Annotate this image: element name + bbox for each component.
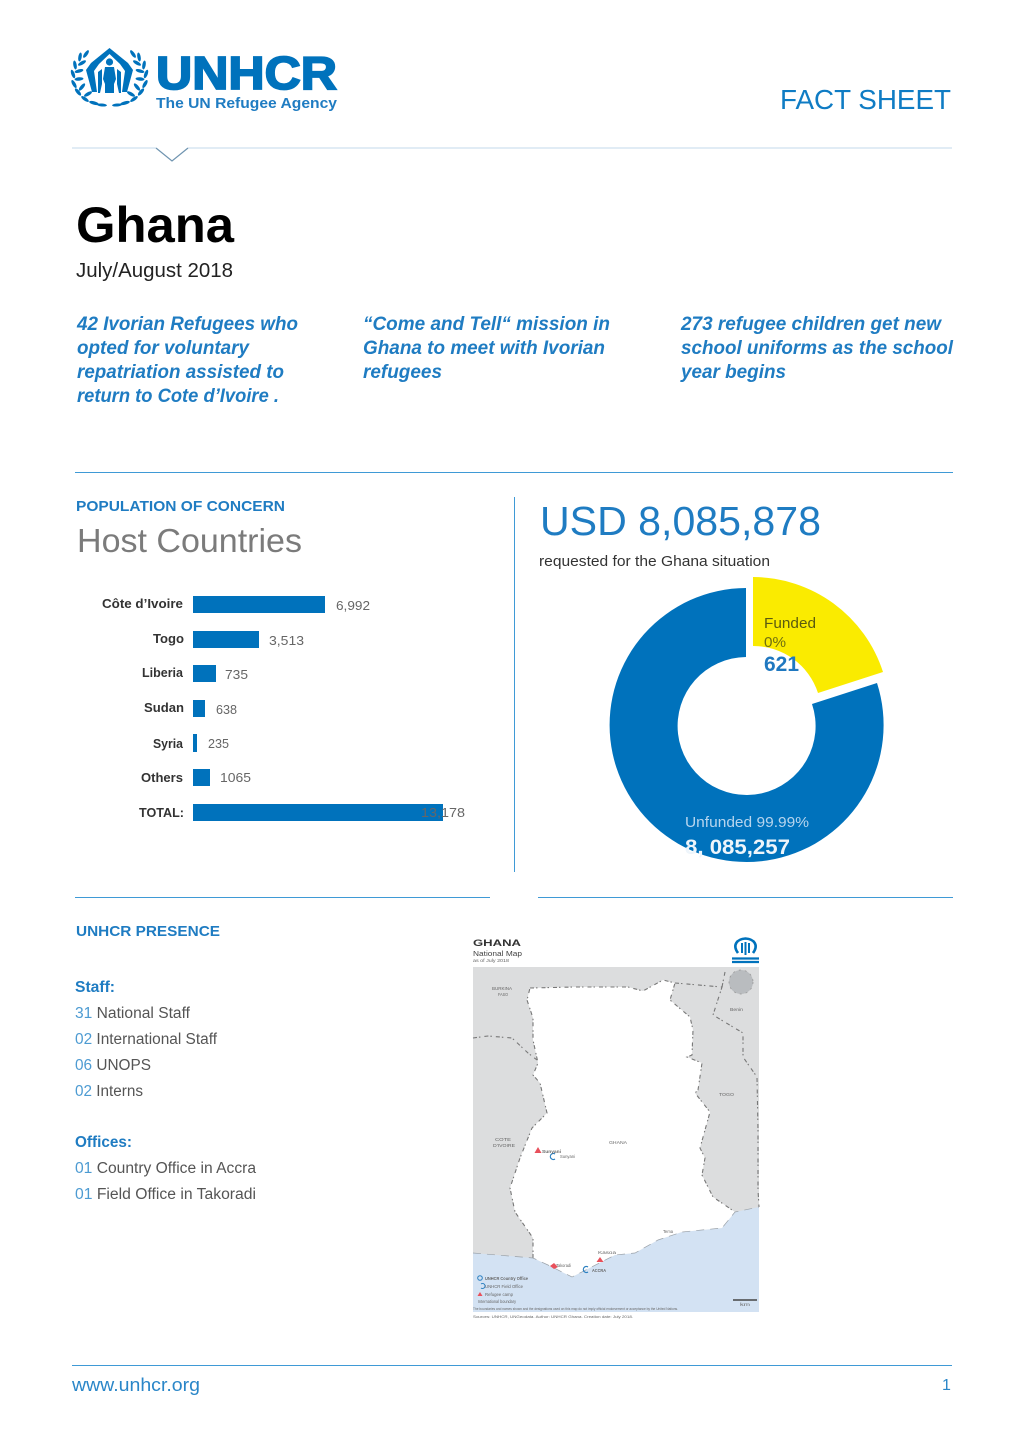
map place labels: ACCRA xyxy=(592,1268,607,1273)
map place labels: Tema xyxy=(663,1229,673,1234)
central figure xyxy=(98,58,121,93)
map legend: International boundary xyxy=(478,1299,517,1304)
bar chart: 6,992 xyxy=(336,599,370,613)
icon: UNHCR emblem xyxy=(70,48,149,107)
text block: highlight 3: year begins xyxy=(680,362,786,383)
funding caption: requested for the Ghana situation xyxy=(539,553,770,570)
text block: highlight 3 xyxy=(680,314,954,383)
unfunded label: 8, 085,257 xyxy=(685,835,790,859)
bar chart: Liberia xyxy=(142,666,184,680)
text block: highlight 3: 273 refugee children get new xyxy=(680,314,942,335)
donut chart xyxy=(610,577,884,862)
map legend: Refugee camp xyxy=(485,1292,513,1297)
bar chart: Togo xyxy=(153,632,184,646)
panel: population of concern xyxy=(76,498,465,821)
map sea xyxy=(473,1207,759,1312)
funded label: 0% xyxy=(764,634,786,651)
bar chart: Côte d’Ivoire xyxy=(102,597,183,611)
funding amount: USD 8,085,878 xyxy=(540,498,821,544)
bar chart: TOTAL: xyxy=(139,806,184,820)
map place labels: TOGO xyxy=(719,1092,735,1097)
sheltering hands xyxy=(86,48,133,92)
map legend: UNHCR Field Office xyxy=(485,1284,523,1289)
text block: highlight 3: school uniforms as the school xyxy=(681,338,954,359)
staff list: Staff: xyxy=(75,979,115,996)
offices list xyxy=(75,1134,256,1203)
map legend xyxy=(478,1276,528,1304)
offices list: 01 Field Office in Takoradi xyxy=(75,1186,256,1203)
bar chart: Sudan xyxy=(144,701,184,715)
coastline xyxy=(473,1207,759,1277)
bar chart: 638 xyxy=(216,703,237,717)
unfunded segment xyxy=(610,588,884,862)
section label: UNHCR PRESENCE xyxy=(76,923,220,940)
staff list xyxy=(75,979,218,1100)
bar chart: 1065 xyxy=(220,771,251,785)
header rule with chevron xyxy=(72,148,952,161)
Ghana territory xyxy=(510,980,735,1277)
staff list: 06 UNOPS xyxy=(75,1057,151,1074)
unfunded label: Unfunded 99.99% xyxy=(685,814,809,831)
unfunded label xyxy=(685,814,809,859)
text block: highlight 2 xyxy=(363,314,610,383)
map land background xyxy=(473,967,759,1312)
inset globe xyxy=(729,970,753,994)
map place labels: Sunyani xyxy=(560,1154,575,1159)
map place labels: Sunyani xyxy=(542,1149,561,1154)
staff list: 31 National Staff xyxy=(75,1005,191,1022)
map place labels: BURKINA xyxy=(492,986,512,991)
text block: highlight 2: “Come and Tell“ mission in xyxy=(363,314,610,335)
funded segment xyxy=(753,577,883,693)
page number: 1 xyxy=(942,1377,951,1394)
section label: POPULATION OF CONCERN xyxy=(76,498,285,515)
map disclaimer xyxy=(473,1307,678,1319)
funded label: 621 xyxy=(764,653,799,676)
text block: highlight 1: 42 Ivorian Refugees who xyxy=(76,314,298,335)
bar chart: 235 xyxy=(208,737,229,751)
map place labels: GHANA xyxy=(609,1140,627,1145)
bar chart: 735 xyxy=(225,668,248,682)
text block: highlight 1: return to Cote d’Ivoire . xyxy=(77,386,279,407)
text block: highlight 2: refugees xyxy=(363,362,442,383)
map place labels: Kasoa xyxy=(598,1250,617,1255)
icon: small UNHCR emblem xyxy=(732,938,759,962)
map place labels: Benin xyxy=(730,1007,744,1012)
text block: highlight 1: opted for voluntary xyxy=(77,338,250,359)
funded label xyxy=(764,615,816,676)
UNHCR logo xyxy=(70,47,338,112)
map place labels xyxy=(492,986,744,1273)
map of Ghana xyxy=(473,938,759,1319)
map scale bar xyxy=(733,1300,757,1307)
offices list: 01 Country Office in Accra xyxy=(75,1160,256,1177)
bar chart: Others xyxy=(141,771,183,785)
map disclaimer: Sources: UNHCR, UNGeodata. Author: UNHCR Ghana. Creation date: July 2018. xyxy=(473,1315,633,1319)
offices list: Offices: xyxy=(75,1134,132,1151)
panel: UNHCR presence xyxy=(75,923,256,1203)
map title xyxy=(473,938,522,963)
text block: highlight 2: Ghana to meet with Ivorian xyxy=(363,338,605,359)
map place labels: COTE xyxy=(495,1137,511,1142)
title: Ghana xyxy=(76,197,235,253)
map scale bar: km xyxy=(740,1302,750,1307)
map place labels: FASO xyxy=(498,992,508,997)
funded label: Funded xyxy=(764,615,816,632)
text block: highlight 1 xyxy=(76,314,298,407)
date: July/August 2018 xyxy=(76,259,233,282)
map disclaimer: The boundaries and names shown and the designations used on this map do not imply official endorsement or acceptance by the United Nations. xyxy=(473,1307,678,1311)
bar chart: Syria xyxy=(153,737,184,751)
panel: funding xyxy=(539,498,884,862)
bar chart: 3,513 xyxy=(269,634,304,648)
footer xyxy=(71,1366,952,1395)
map place labels: Takoradi xyxy=(556,1263,571,1268)
logo wordmark: UNHCR xyxy=(156,47,337,99)
bar chart: 13,178 xyxy=(421,806,465,820)
staff list: 02 International Staff xyxy=(75,1031,218,1048)
bar chart xyxy=(102,596,465,821)
office markers xyxy=(534,1147,604,1273)
map legend: UNHCR Country Office xyxy=(485,1276,528,1281)
staff list: 02 Interns xyxy=(75,1083,143,1100)
map title: GHANA xyxy=(473,938,521,949)
laurel wreath xyxy=(70,49,149,107)
map place labels: D'IVOIRE xyxy=(493,1143,515,1148)
map title: as of July 2018 xyxy=(473,958,510,963)
heading: host countries: Host Countries xyxy=(77,522,302,559)
heading: fact sheet: FACT SHEET xyxy=(780,84,951,115)
footer url: www.unhcr.org xyxy=(71,1375,200,1395)
map title: National Map xyxy=(473,951,522,958)
logo tagline: The UN Refugee Agency xyxy=(156,95,338,112)
map borders xyxy=(473,972,759,1258)
text block: highlight 1: repatriation assisted to xyxy=(77,362,284,383)
